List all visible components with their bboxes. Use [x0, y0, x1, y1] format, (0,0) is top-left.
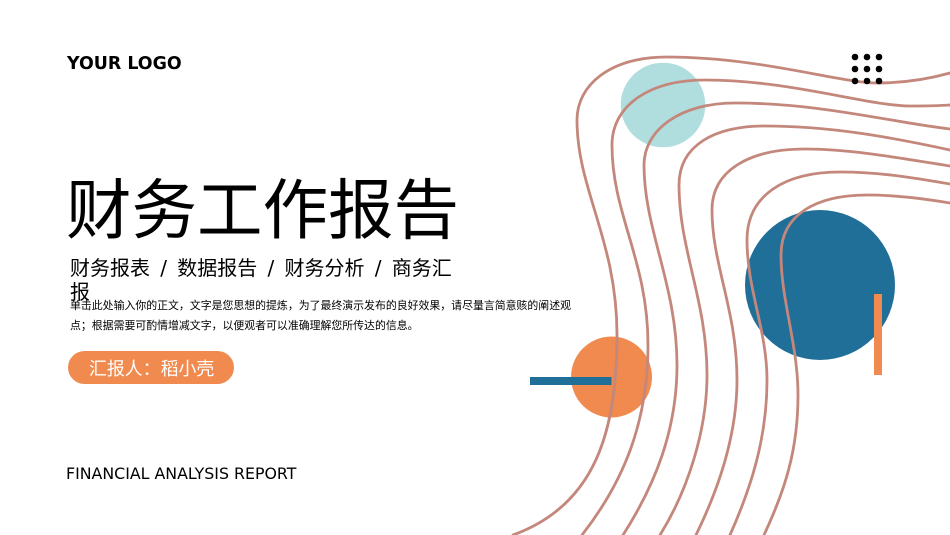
blue bar: [530, 377, 612, 385]
body text: 单击此处输入你的正文，文字是您思想的提炼，为了最终演示发布的良好效果，请尽量言简意赅的阐述观 点；根据需要可酌情增减文字，以便观者可以准确理解您所传达的信息。: [70, 299, 571, 332]
icon: dot grid: [852, 54, 882, 84]
flowing curved lines: [513, 57, 950, 535]
teal circle: [621, 63, 705, 147]
orange bar: [874, 294, 882, 375]
title: 财务工作报告: [66, 173, 459, 249]
english caption: FINANCIAL ANALYSIS REPORT: [66, 464, 296, 483]
blue circle: [745, 210, 895, 360]
subtitle: 财务报表 / 数据报告 / 财务分析 / 商务汇 报: [70, 256, 452, 304]
presenter pill: [68, 351, 234, 384]
logo: YOUR LOGO: [67, 54, 182, 74]
orange circle: [571, 336, 652, 418]
presenter name: 汇报人：稻小壳: [89, 359, 214, 380]
